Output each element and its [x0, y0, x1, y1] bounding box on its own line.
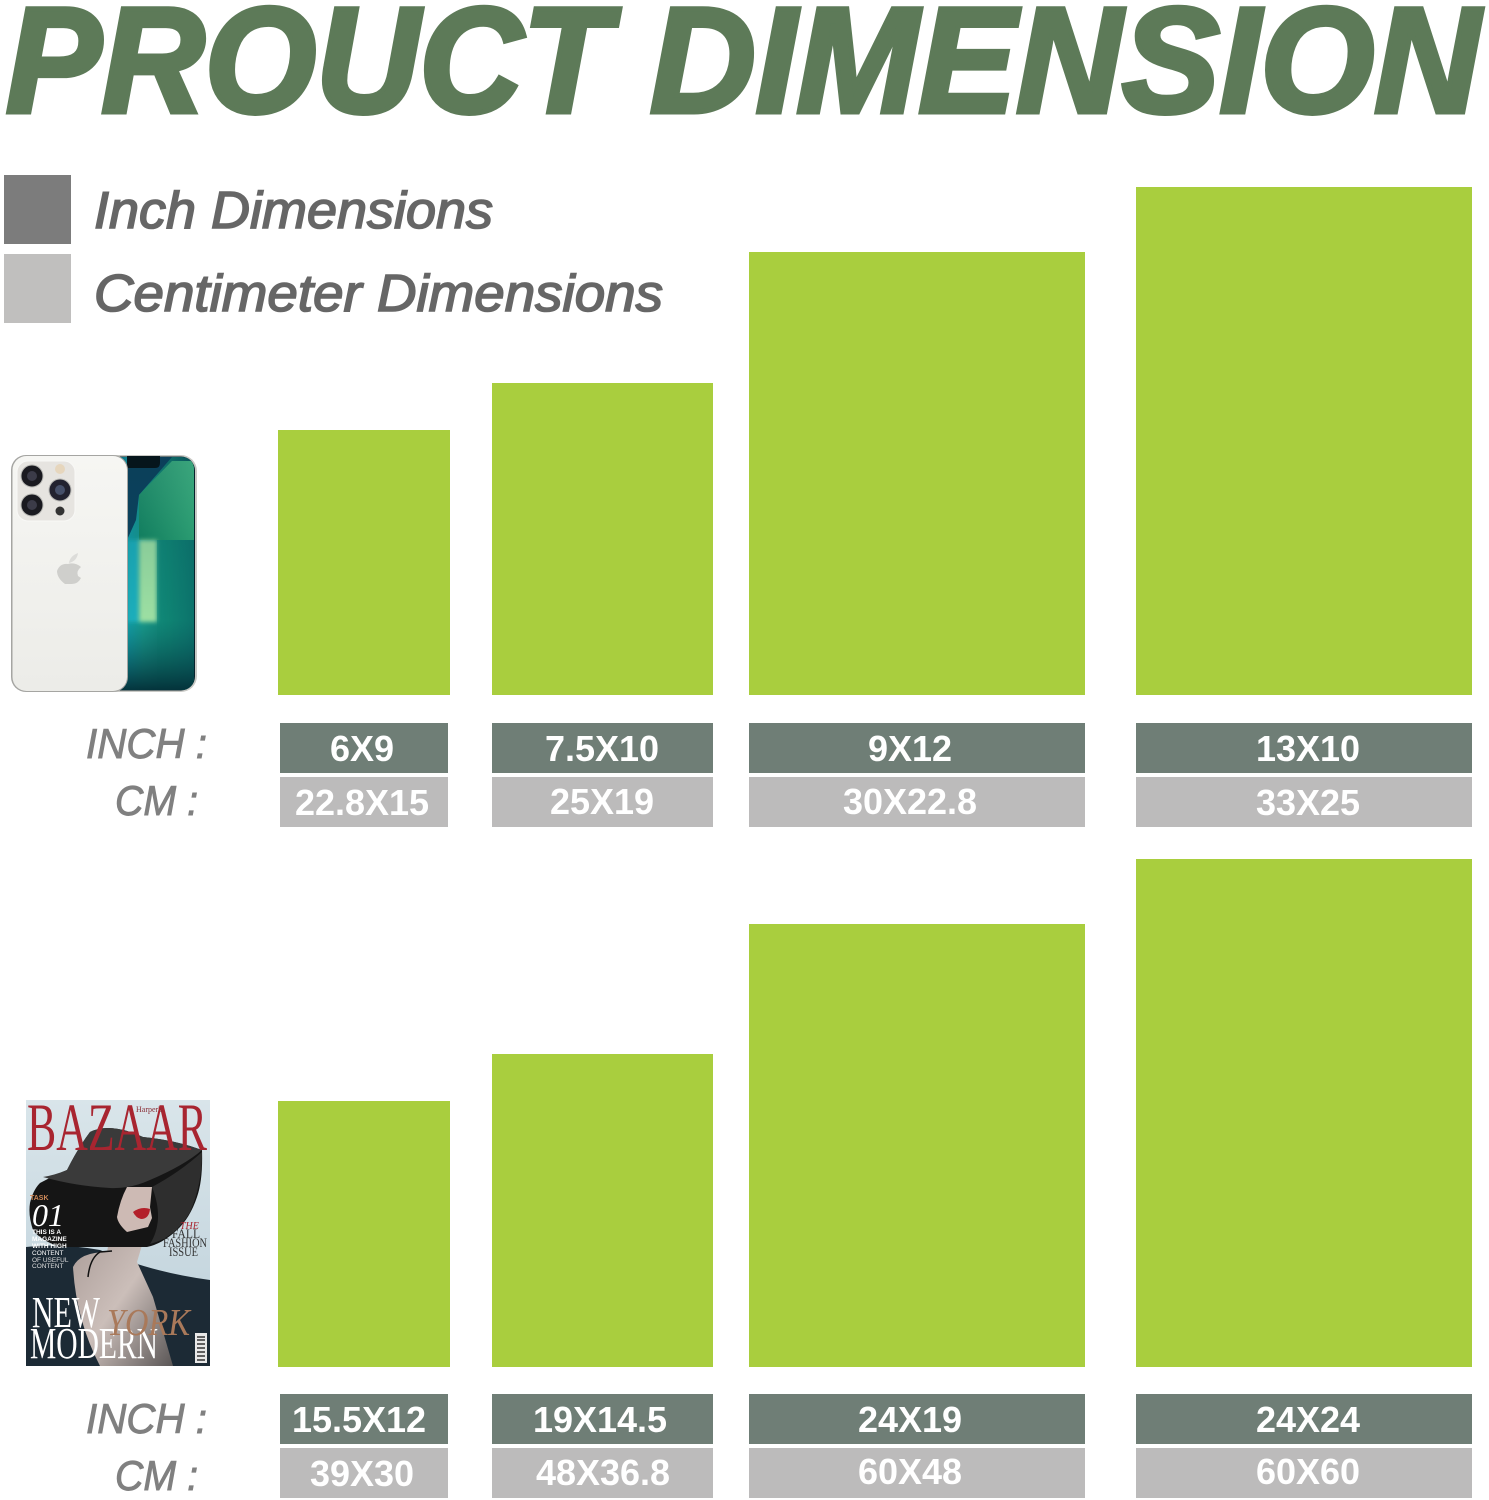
icon: magazine for scale: MAGAZINE: [32, 1236, 67, 1243]
icon: magazine for scale: MODERN: [30, 1319, 158, 1368]
icon: magazine for scale: NEW: [32, 1288, 100, 1337]
row 1 labels: 13X10: [1256, 728, 1360, 769]
icon: magazine for scale: Harper's: [136, 1105, 163, 1114]
icon: magazine for scale: TASK: [30, 1195, 49, 1202]
row 1 labels: [86, 720, 1472, 827]
row 2 labels: 15.5X12: [292, 1399, 426, 1440]
icon: magazine for scale: ISSUE: [169, 1244, 198, 1259]
row 2 labels: 48X36.8: [536, 1452, 670, 1493]
bars row 1: [278, 187, 1472, 695]
row 2 labels: 24X19: [858, 1399, 962, 1440]
row 2 labels: CM :: [115, 1452, 198, 1499]
row 2 labels: 39X30: [310, 1453, 414, 1494]
legend: [4, 175, 663, 323]
row 1 labels: 7.5X10: [545, 728, 659, 769]
icon: magazine for scale: FALL: [172, 1226, 200, 1241]
row 1 labels: CM :: [115, 777, 198, 824]
row 1 labels: 22.8X15: [295, 782, 429, 823]
icon: magazine for scale: THIS IS A: [32, 1229, 61, 1236]
legend label: inch: Inch Dimensions: [94, 182, 493, 240]
row 1 labels: 9X12: [868, 728, 952, 769]
row 2 labels: INCH :: [86, 1395, 207, 1442]
legend label: centimeter: Centimeter Dimensions: [94, 265, 663, 323]
title: [6, 0, 1483, 144]
icon: magazine for scale: OF USEFUL: [32, 1257, 69, 1264]
icon: magazine for scale: 01: [32, 1197, 64, 1233]
row 2 labels: 60X60: [1256, 1451, 1360, 1492]
row 2 labels: [86, 1394, 1472, 1499]
icon: magazine for scale: CONTENT: [32, 1250, 63, 1257]
row 1 labels: INCH :: [86, 720, 207, 767]
bars row 2: [278, 859, 1472, 1367]
row 1 labels: 25X19: [550, 781, 654, 822]
icon: magazine for scale: WITH HIGH: [32, 1243, 67, 1250]
legend swatch: centimeter: [4, 254, 71, 323]
row 2 labels: 19X14.5: [533, 1399, 667, 1440]
icon: magazine for scale: [26, 1089, 210, 1368]
icon: magazine for scale: BAZAAR: [27, 1089, 207, 1165]
row 1 labels: 33X25: [1256, 782, 1360, 823]
icon: magazine for scale: YORK: [107, 1302, 191, 1344]
row 1 labels: 30X22.8: [843, 781, 977, 822]
row 1 labels: 6X9: [330, 728, 394, 769]
icon: magazine for scale: FASHION: [163, 1235, 207, 1250]
icon: magazine for scale: THE: [180, 1221, 199, 1232]
legend swatch: inch: [4, 175, 71, 244]
row 2 labels: 60X48: [858, 1451, 962, 1492]
icon: magazine for scale: CONTENT: [32, 1263, 63, 1270]
icon: phone for scale: [11, 455, 197, 692]
row 2 labels: 24X24: [1256, 1399, 1360, 1440]
